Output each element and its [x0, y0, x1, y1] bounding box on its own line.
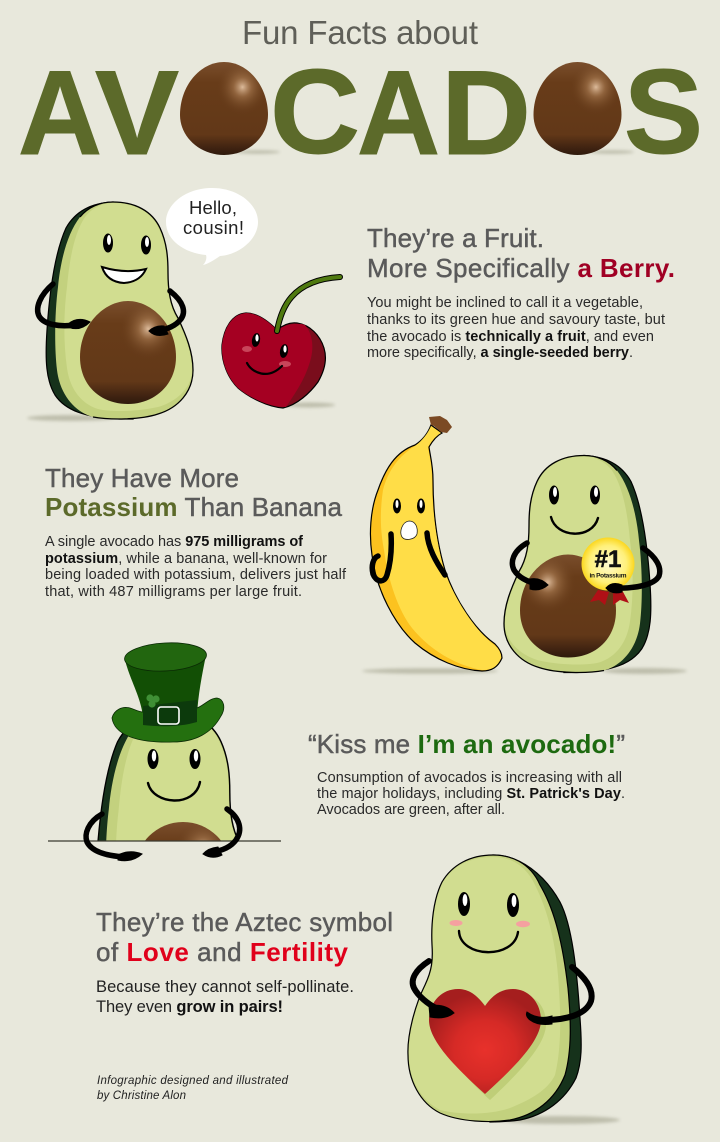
section 2 body	[45, 534, 347, 600]
section 1 body: more specifically, a single-seeded berry.	[367, 345, 633, 361]
medal	[582, 538, 634, 605]
section 3 body: Consumption of avocados is increasing with all	[317, 770, 622, 786]
illustration: banana and avocado with medal	[362, 416, 687, 674]
section 3 heading: “Kiss me I’m an avocado!”	[308, 729, 625, 759]
avocado face	[102, 234, 151, 283]
ground shadows	[27, 402, 335, 421]
ground shadows	[362, 668, 687, 674]
credit	[97, 1075, 289, 1102]
leprechaun hat	[112, 641, 224, 742]
section 2 body: A single avocado has 975 milligrams of	[45, 534, 303, 550]
credit: Infographic designed and illustrated	[97, 1075, 289, 1087]
section 4 heading: They’re the Aztec symbol	[96, 907, 393, 937]
section 1 body	[367, 295, 665, 361]
medal: in Potassium	[590, 572, 627, 580]
seed as letter O, second	[534, 62, 622, 155]
wordmark letters: A	[18, 46, 102, 180]
section 2 body: that, with 487 milligrams per large fruit.	[45, 584, 302, 600]
table line	[48, 840, 281, 842]
avocado arms	[38, 284, 183, 335]
illustration: avocado with heart	[408, 855, 620, 1124]
avocado body	[504, 456, 651, 672]
wordmark letters: S	[624, 45, 703, 179]
section 1 body: the avocado is technically a fruit, and even	[367, 329, 654, 345]
title: AVOCADOS	[18, 45, 703, 180]
avocado body	[408, 855, 581, 1122]
section 2 body: potassium, while a banana, well-known for	[45, 551, 327, 567]
illustration: avocado with leprechaun hat	[48, 642, 281, 862]
section 2 body: being loaded with potassium, delivers just half	[45, 567, 347, 583]
wordmark letters: V	[95, 46, 179, 180]
wordmark letters: C	[270, 45, 360, 179]
arms	[86, 809, 240, 861]
avocado seed	[520, 554, 616, 658]
avocado body cropped by table	[97, 728, 236, 840]
section 4 body	[96, 978, 354, 1016]
seed as letter O, first	[180, 62, 268, 155]
wordmark letters	[18, 45, 703, 180]
section 4 heading	[96, 907, 393, 967]
section 1 heading: More Specifically a Berry.	[367, 253, 675, 283]
arms	[413, 961, 592, 1024]
section 1 heading	[367, 223, 675, 283]
illustration: avocado and cherry	[27, 188, 340, 421]
heart	[429, 989, 541, 1094]
medal: #1	[595, 546, 621, 573]
section 4 body: Because they cannot self-pollinate.	[96, 978, 354, 996]
section 3 body: the major holidays, including St. Patrick's Day.	[317, 786, 625, 802]
section 4 body: They even grow in pairs!	[96, 998, 283, 1016]
ground shadow	[500, 1116, 620, 1124]
banana	[370, 416, 502, 671]
section 2 heading	[45, 463, 343, 522]
section 1 body: thanks to its green hue and savoury taste, but	[367, 312, 665, 328]
clover	[146, 694, 160, 708]
section 4 heading: of Love and Fertility	[96, 937, 349, 967]
cherry	[222, 277, 340, 408]
avocado body	[46, 202, 193, 419]
section 2 heading: They Have More	[45, 463, 239, 493]
face	[148, 749, 200, 801]
title: Fun Facts about: Fun Facts about	[242, 14, 478, 51]
wordmark letters: D	[441, 46, 531, 180]
speech bubble: Hello,	[189, 197, 237, 218]
section 2 heading: Potassium Than Banana	[45, 492, 343, 522]
heart shade	[434, 994, 546, 1100]
avocado seed	[80, 301, 176, 404]
speech bubble	[166, 188, 258, 265]
section 3 body: Avocados are green, after all.	[317, 802, 505, 818]
seed shadows	[236, 150, 634, 154]
face	[450, 892, 530, 952]
credit: by Christine Alon	[97, 1090, 186, 1102]
wordmark letters: A	[357, 46, 440, 180]
section 3 body	[317, 770, 625, 818]
speech bubble: cousin!	[183, 217, 244, 238]
section 1 heading: They’re a Fruit.	[367, 223, 544, 253]
banana arms	[372, 533, 445, 581]
section 1 body: You might be inclined to call it a vegetable,	[367, 295, 643, 311]
avocado arms	[512, 543, 660, 593]
avocado face	[549, 486, 600, 534]
